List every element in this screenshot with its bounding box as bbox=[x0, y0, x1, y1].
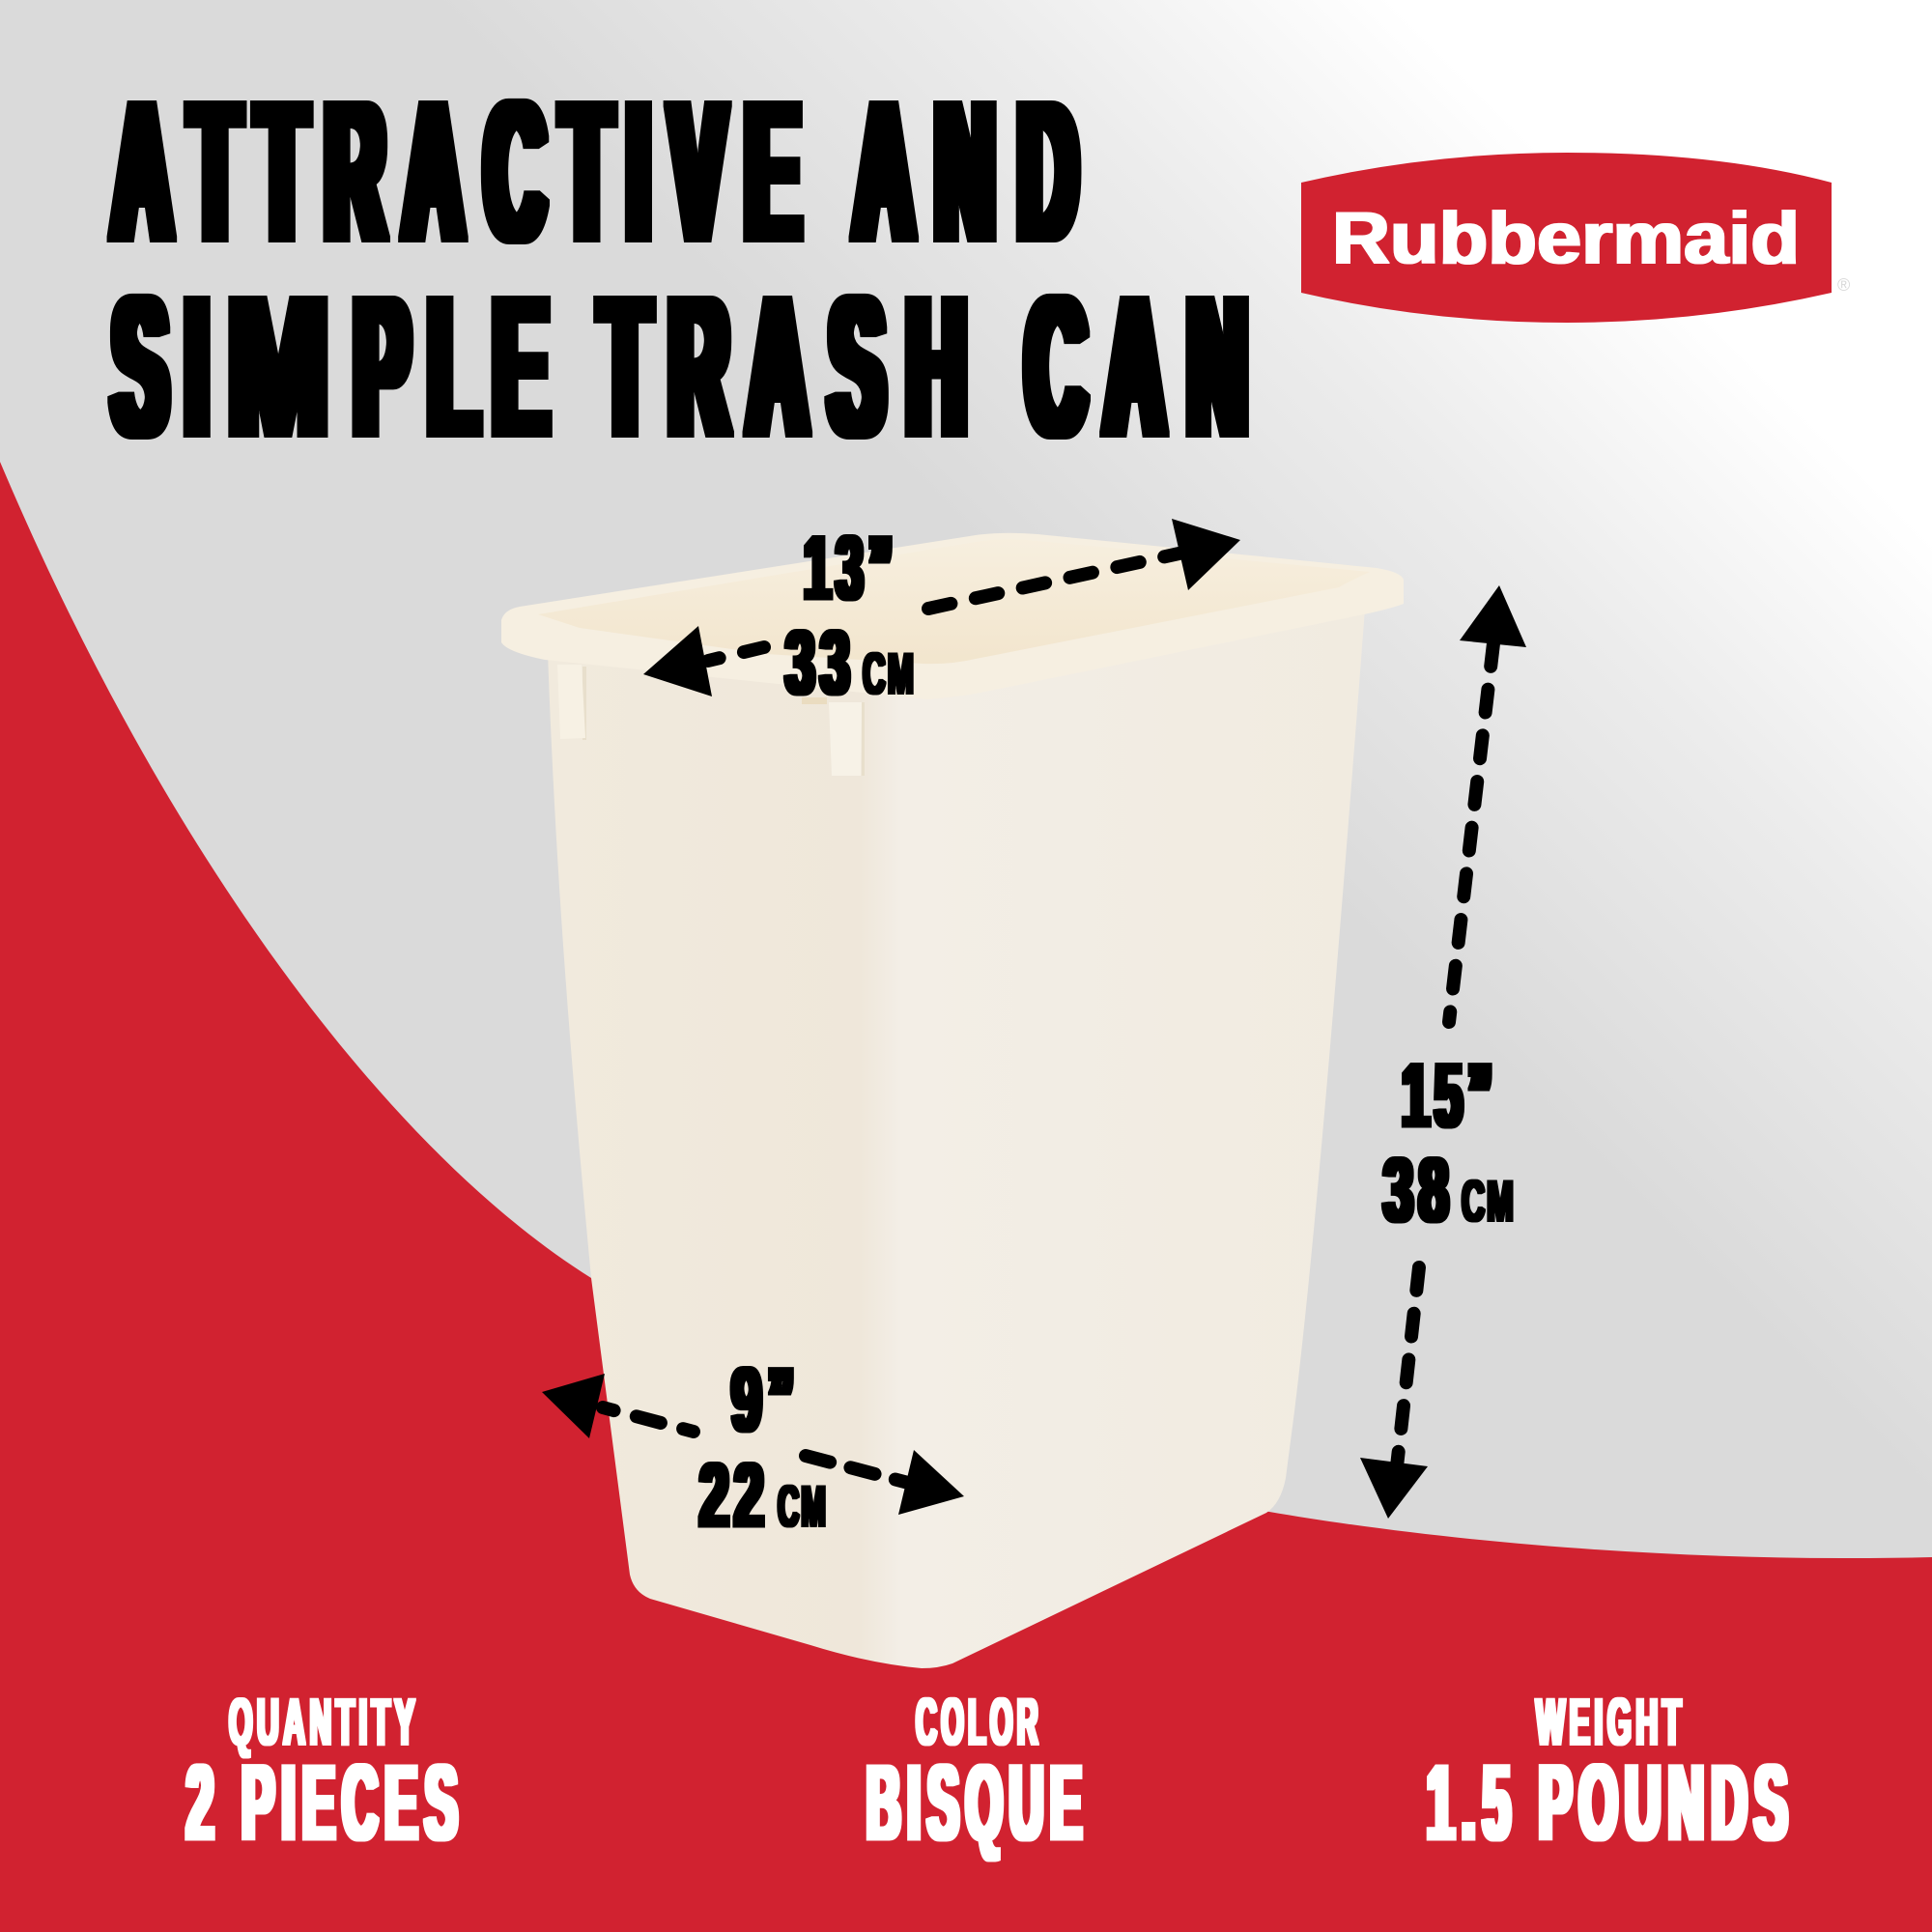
label: 13 in: CM bbox=[863, 641, 916, 706]
spec: quantity: QUANTITY bbox=[229, 1685, 419, 1759]
logo: Rubbermaid: Rubbermaid bbox=[1332, 197, 1800, 280]
arrow: 15 in height, lower part bbox=[1360, 1267, 1428, 1519]
title: SIM PLE TRASH CAN bbox=[113, 257, 1247, 477]
label: 9 in: 9” bbox=[731, 1349, 800, 1450]
rib front bbox=[829, 702, 865, 776]
label: 9 in bbox=[699, 1349, 828, 1546]
text: BISQUE bbox=[867, 1744, 1089, 1862]
can body bbox=[548, 609, 1365, 1668]
logo: Rubbermaid: ® bbox=[1837, 275, 1850, 295]
spec: color bbox=[867, 1685, 1089, 1862]
title bbox=[112, 62, 1247, 477]
red swoosh shape bbox=[0, 462, 1932, 1932]
label: 15 in bbox=[1383, 1044, 1516, 1240]
can opening bbox=[538, 539, 1370, 664]
label: 15 in: 38 bbox=[1383, 1139, 1454, 1240]
arrow: 13 in width, right part bbox=[928, 519, 1240, 609]
arrow: 9 in depth, left part bbox=[542, 1374, 694, 1438]
label: 9 in: CM bbox=[778, 1474, 828, 1539]
text: 2 PIECES bbox=[186, 1744, 465, 1862]
can rim bbox=[501, 533, 1404, 699]
label: 13 in: 33 bbox=[785, 611, 855, 713]
spec: quantity bbox=[186, 1685, 465, 1862]
spec: weight: WEIGHT bbox=[1536, 1685, 1686, 1759]
label: 15 in: 15” bbox=[1402, 1044, 1497, 1146]
rib left bbox=[557, 665, 586, 740]
spec: color: COLOR bbox=[916, 1685, 1042, 1759]
label: 15 in: CM bbox=[1462, 1169, 1516, 1234]
logo: Rubbermaid bbox=[1301, 153, 1850, 323]
arrow: 13 in width, left part bbox=[643, 626, 764, 696]
label: 13 in bbox=[785, 517, 916, 713]
label: 9 in: 22 bbox=[699, 1444, 769, 1546]
spec: weight bbox=[1427, 1685, 1795, 1862]
arrow: 9 in depth, right part bbox=[806, 1450, 964, 1515]
label: 13 in: 13” bbox=[804, 517, 897, 618]
rib small bbox=[802, 697, 827, 704]
trash can bbox=[501, 533, 1404, 1668]
title: ATTRACTIVE AND bbox=[112, 62, 1077, 282]
arrow: 15 in height, upper part bbox=[1449, 585, 1526, 1022]
